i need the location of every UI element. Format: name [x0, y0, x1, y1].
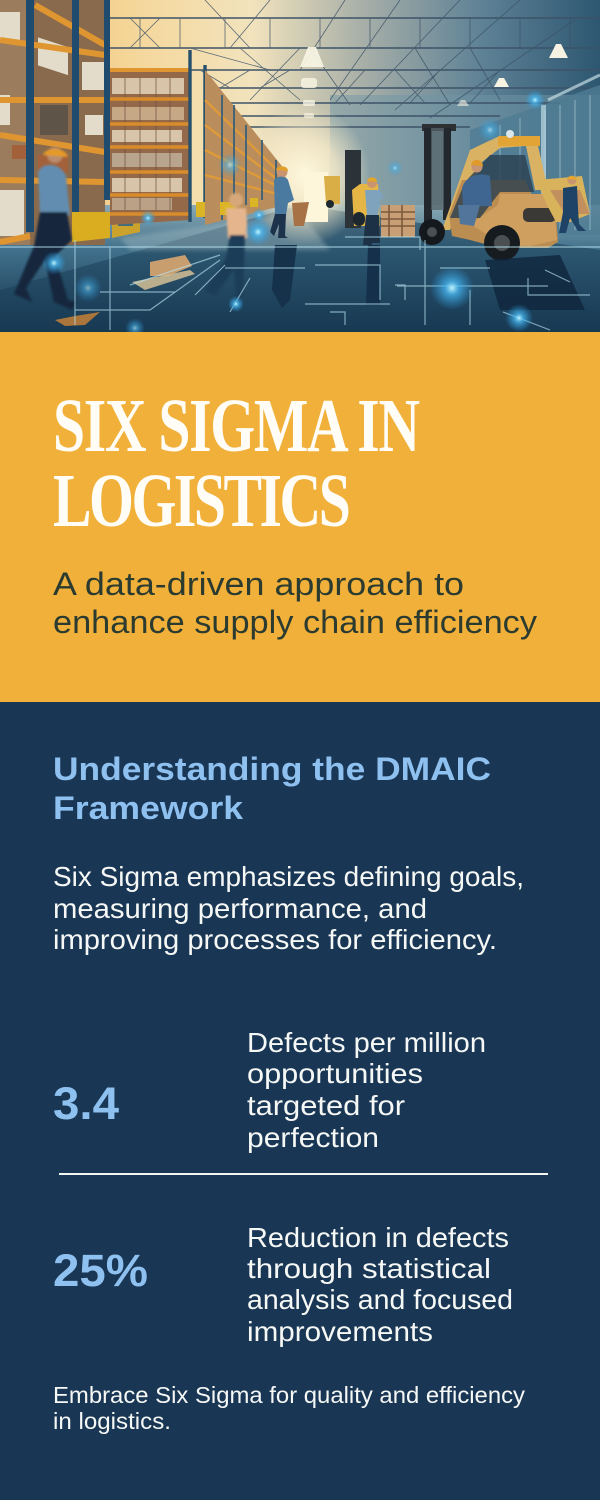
stat: 3.4 description	[247, 1027, 486, 1153]
intro paragraph: Six Sigma emphasizes defining goals,	[53, 861, 524, 892]
distant forklifts	[324, 150, 380, 228]
heading: understanding the DMAIC framework: Framework	[53, 790, 243, 826]
subtitle	[53, 566, 537, 640]
subtitle: A data-driven approach to	[53, 566, 464, 602]
stat: 25% description: analysis and focused	[247, 1284, 513, 1315]
pallet stack	[381, 205, 415, 237]
panel: gold title band	[0, 332, 600, 702]
left blurred worker	[14, 147, 76, 310]
heading: understanding the DMAIC framework	[53, 751, 491, 826]
stat: 3.4 value: 3.4	[53, 1078, 119, 1129]
title: SIX SIGMA IN	[53, 383, 420, 468]
intro paragraph: improving processes for efficiency.	[53, 924, 497, 955]
stat: 3.4 description: perfection	[247, 1122, 379, 1153]
driver	[458, 160, 492, 226]
digital circuit overlay lines	[0, 237, 600, 330]
floor box and reflections	[55, 245, 585, 326]
title	[53, 383, 420, 543]
stat: 3.4 description: targeted for	[247, 1090, 405, 1121]
panel: navy content section	[0, 702, 600, 1500]
shelving: receding racks	[205, 70, 285, 225]
hero photo: warehouse with forklifts and workers	[0, 0, 600, 338]
stat: 25% description	[247, 1222, 513, 1347]
shelving: middle rack	[110, 50, 212, 225]
worker with tablet	[363, 177, 384, 245]
title: LOGISTICS	[53, 458, 351, 543]
stat: 3.4 description: opportunities	[247, 1058, 423, 1089]
heading: understanding the DMAIC framework: Understanding the DMAIC	[53, 751, 491, 787]
stat: 25% description: Reduction in defects	[247, 1222, 509, 1253]
right wall windows	[470, 75, 600, 235]
stat: 3.4 description: Defects per million	[247, 1027, 486, 1058]
closing statement: in logistics.	[53, 1408, 171, 1434]
stat: 25% description: through statistical	[247, 1253, 491, 1284]
main forklift	[419, 124, 558, 261]
stat: 25% description: improvements	[247, 1316, 433, 1347]
rear forklift and right worker	[536, 176, 590, 233]
floor	[0, 205, 600, 332]
subtitle: enhance supply chain efficiency	[53, 604, 537, 640]
glowing data nodes	[42, 90, 545, 338]
closing statement: Embrace Six Sigma for quality and efficiency	[53, 1382, 526, 1408]
closing statement	[53, 1382, 526, 1434]
vanishing glow	[259, 114, 367, 242]
small blurred worker	[205, 193, 248, 298]
center worker with box	[270, 166, 309, 238]
stat: 25% value: 25%	[53, 1245, 148, 1296]
intro paragraph	[53, 861, 524, 955]
intro paragraph: measuring performance, and	[53, 893, 427, 924]
ceiling trusses	[110, 0, 600, 127]
shelving: far left rack	[0, 0, 140, 245]
ceiling lamps	[300, 44, 568, 118]
